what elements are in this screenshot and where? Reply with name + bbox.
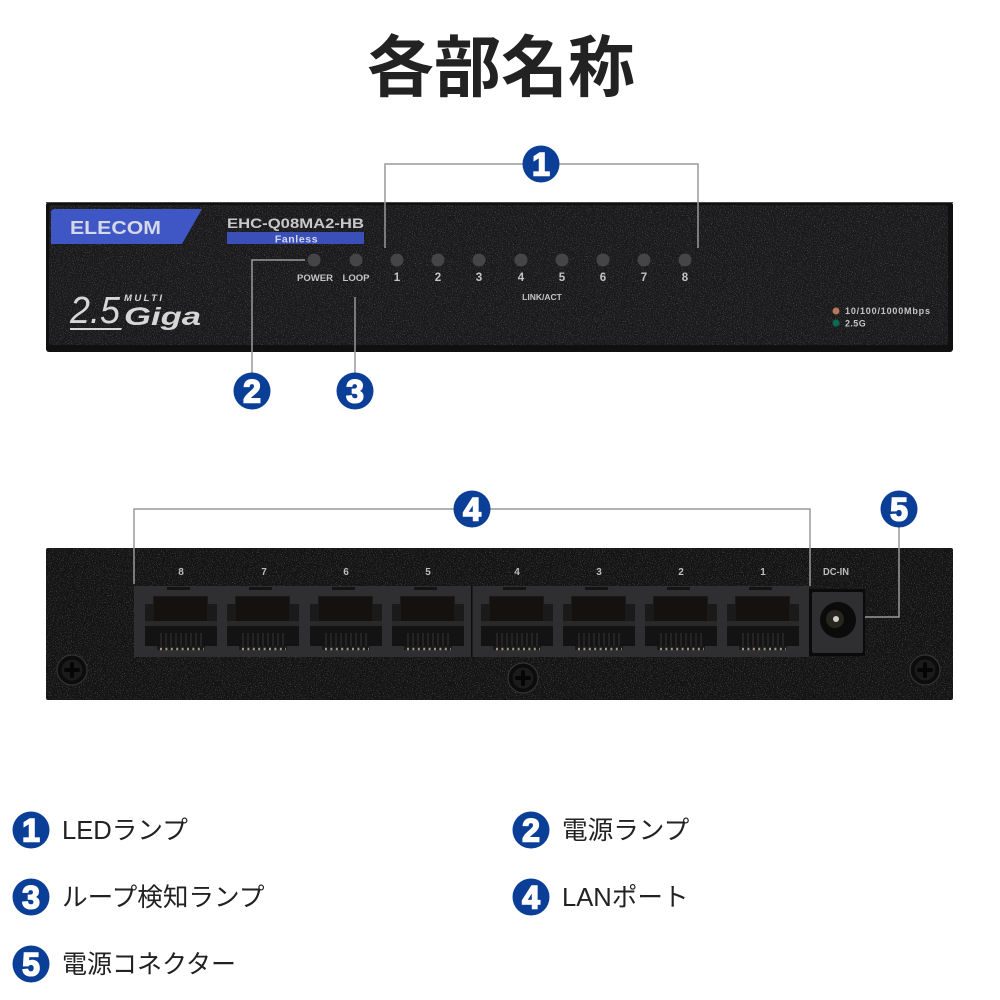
legend 3: loop detection lamp (12, 878, 265, 916)
callout 3: loop lamp: 3 (346, 374, 364, 410)
LED labels: 8 (682, 272, 689, 284)
LED labels: 5 (559, 272, 566, 284)
DC power jack (809, 589, 865, 656)
fanless badge: Fanless (275, 234, 318, 246)
callout 2: power lamp: 2 (243, 374, 261, 410)
LED labels: 2 (435, 272, 441, 284)
callout 4: LAN ports (134, 490, 810, 586)
device front body (46, 202, 953, 352)
callout 5: DC connector: 5 (890, 492, 908, 528)
LED labels: LOOP (343, 273, 370, 284)
screws (57, 655, 940, 693)
legend 1: LED lamps (12, 812, 188, 848)
legend 5: power connector (12, 946, 236, 982)
LAN ports (134, 586, 809, 657)
speed legend (832, 306, 930, 328)
fanless badge (227, 232, 364, 246)
callout 4: LAN ports: 4 (463, 492, 481, 528)
port numbers: 2 (678, 567, 684, 578)
LED labels: 3 (476, 272, 482, 284)
2.5G multi gigabit logo: MULTI (124, 293, 162, 304)
2.5G multi gigabit logo: 2.5 (69, 290, 121, 332)
LED labels: LINK/ACT (522, 292, 563, 302)
port numbers: 3 (596, 567, 602, 578)
callout 5: DC connector (865, 490, 918, 617)
legend 1: LED lamps: 1 (22, 812, 40, 848)
LED labels (297, 272, 689, 302)
model name: EHC-Q08MA2-HB (227, 215, 364, 231)
legend 2: power lamp: 2 (522, 812, 540, 848)
port numbers: 1 (760, 567, 766, 578)
legend 2: power lamp: 電源ランプ (562, 816, 690, 845)
legend 5: power connector: 電源コネクター (62, 950, 236, 979)
LED labels: POWER (297, 273, 333, 284)
status LEDs (308, 254, 692, 266)
port numbers: 4 (514, 567, 520, 578)
callout 2: power lamp (234, 260, 305, 410)
callout 1: LED lamps (385, 146, 698, 248)
ELECOM logo: ELECOM (70, 218, 161, 238)
2.5G multi gigabit logo: Giga (124, 303, 201, 331)
LED labels: 6 (600, 272, 606, 284)
speed legend: 2.5G (845, 318, 866, 328)
legend 3: loop detection lamp: 3 (22, 880, 40, 916)
LED labels: 7 (641, 272, 647, 284)
legend 4: LAN port: LANポート (562, 883, 689, 912)
port numbers: 8 (178, 567, 184, 578)
title: 各部名称 (367, 14, 635, 111)
port numbers (178, 567, 766, 578)
speed legend: 10/100/1000Mbps (845, 306, 930, 316)
panel: front view of switch (46, 202, 953, 352)
legend 2: power lamp (512, 812, 690, 848)
port numbers: 6 (343, 567, 349, 578)
port numbers: 7 (261, 567, 267, 578)
device rear body (46, 548, 953, 700)
legend 3: loop detection lamp: ループ検知ランプ (62, 883, 265, 912)
panel: rear view of switch (46, 548, 953, 700)
LED labels: 1 (394, 272, 401, 284)
LED labels: 4 (518, 272, 525, 284)
DC-IN label: DC-IN (823, 567, 849, 578)
callout 1: LED lamps: 1 (532, 146, 550, 182)
ELECOM logo (51, 209, 202, 244)
2.5G multi gigabit logo (69, 290, 201, 332)
legend 5: power connector: 5 (22, 946, 40, 982)
legend 4: LAN port: 4 (522, 880, 540, 916)
legend 4: LAN port (512, 878, 689, 916)
legend 1: LED lamps: LEDランプ (62, 816, 188, 845)
callout 3: loop lamp (336, 297, 374, 410)
port numbers: 5 (425, 567, 431, 578)
